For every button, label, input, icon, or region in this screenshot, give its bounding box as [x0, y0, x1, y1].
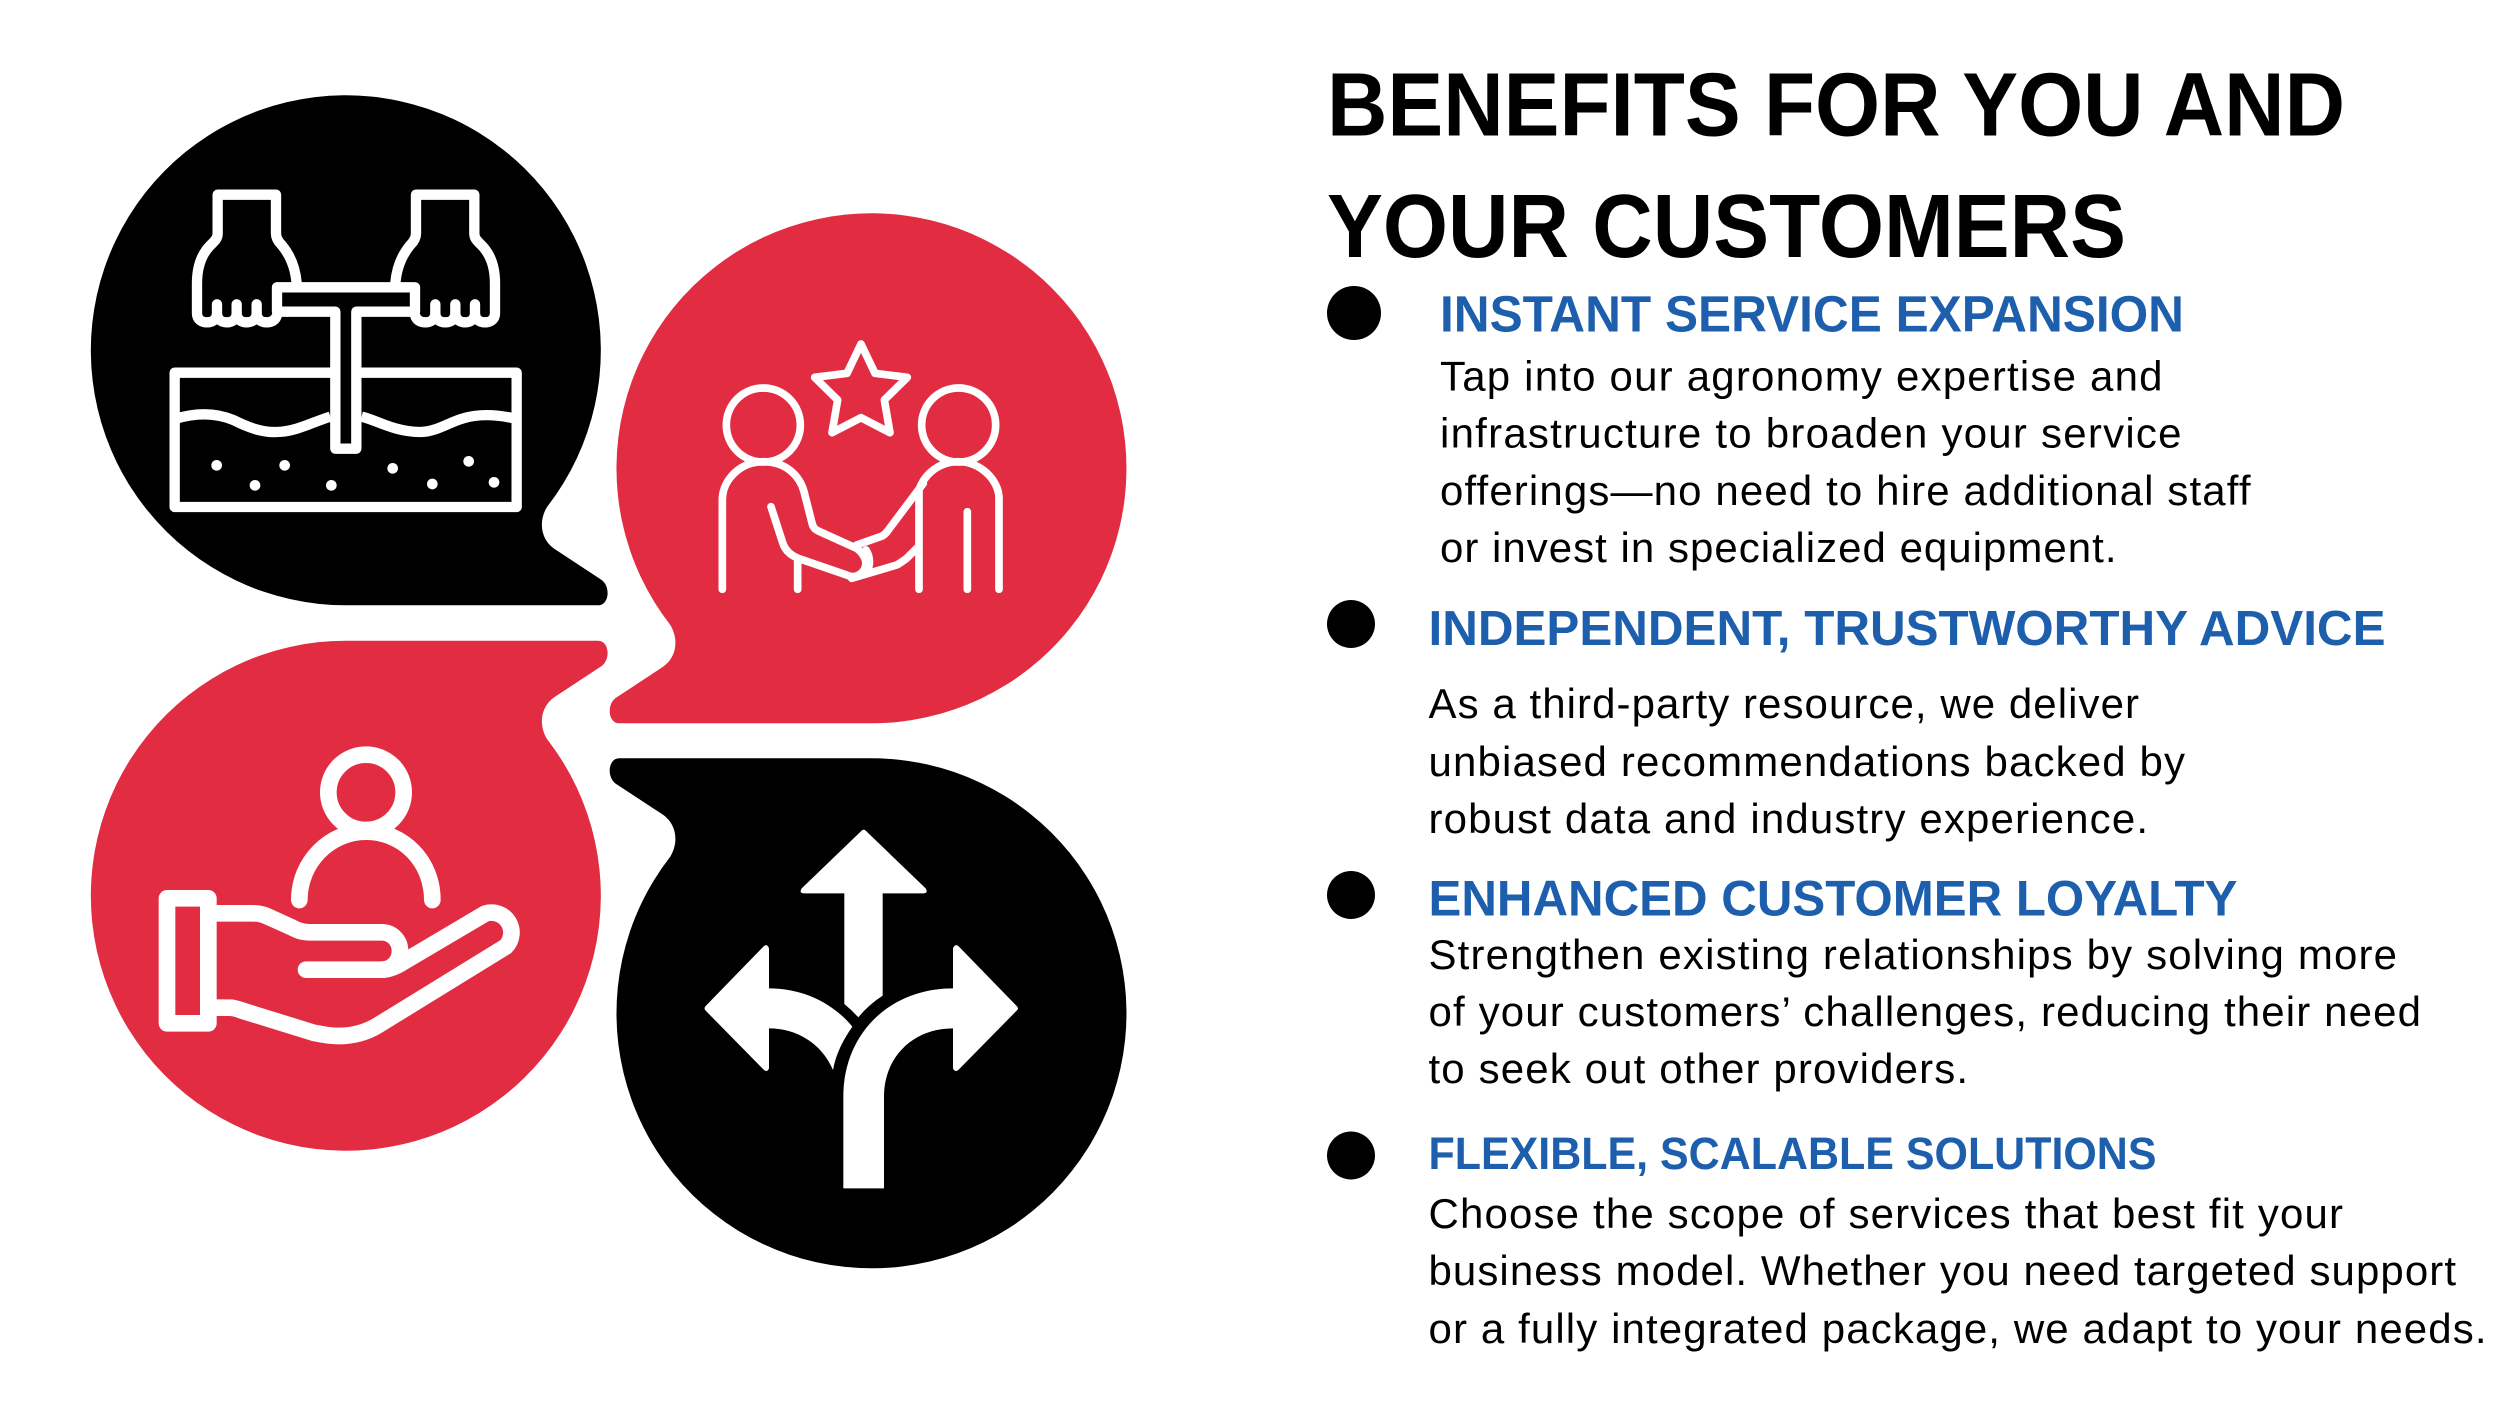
body text: infrastructure to broaden your service — [1440, 410, 2182, 456]
body text — [1428, 931, 2421, 1092]
panel: black bubble soil tool — [91, 95, 608, 605]
bubble shape black top left — [91, 95, 608, 605]
body text: offerings—no need to hire additional staff — [1440, 467, 2251, 514]
bubble shape red top right — [610, 213, 1126, 723]
bullet — [1327, 600, 1375, 648]
panel: red bubble handshake — [610, 213, 1126, 723]
bullet — [1327, 1132, 1375, 1180]
body text: Strengthen existing relationships by solving more — [1428, 931, 2397, 978]
benefit: instant service expansion — [1327, 286, 2251, 571]
bubble shape black bottom right — [610, 758, 1126, 1268]
bullet — [1327, 286, 1381, 340]
panel: red bubble person in hand — [91, 641, 608, 1151]
benefit: independent, trustworthy advice — [1327, 600, 2386, 842]
body text: unbiased recommendations backed by — [1428, 738, 2185, 785]
icon: handshake with star — [722, 344, 999, 589]
icon: three direction arrows — [704, 830, 1018, 1188]
title: YOUR CUSTOMERS — [1327, 177, 2126, 277]
body text — [1428, 680, 2185, 842]
body text: Choose the scope of services that best fit your — [1428, 1190, 2343, 1237]
body text: to seek out other providers. — [1428, 1045, 1968, 1092]
panel: black bubble branching arrows — [610, 758, 1126, 1268]
bubble shape red bottom left — [91, 641, 608, 1151]
title: BENEFITS FOR YOU AND — [1327, 56, 2345, 156]
body text: Tap into our agronomy expertise and — [1440, 352, 2162, 400]
icon: hand holding a person — [167, 755, 511, 1036]
title — [1327, 56, 2345, 277]
heading: INSTANT SERVICE EXPANSION — [1440, 286, 2184, 342]
body text: or a fully integrated package, we adapt to your needs. — [1428, 1305, 2486, 1352]
body text — [1440, 352, 2251, 571]
heading: INDEPENDENT, TRUSTWORTHY ADVICE — [1428, 602, 2386, 656]
body text: of your customers’ challenges, reducing their need — [1428, 988, 2421, 1035]
panel: speech bubbles with icons — [91, 95, 1126, 1268]
bullet — [1327, 871, 1375, 919]
heading: FLEXIBLE, SCALABLE SOLUTIONS — [1428, 1128, 2156, 1179]
body text: As a third-party resource, we deliver — [1428, 680, 2139, 727]
body text: robust data and industry experience. — [1428, 795, 2148, 842]
body text — [1428, 1190, 2486, 1352]
heading: ENHANCED CUSTOMER LOYALTY — [1428, 870, 2238, 926]
icon: hands pressing T-handle soil probe — [175, 195, 517, 507]
body text: or invest in specialized equipment. — [1440, 524, 2116, 571]
body text: business model. Whether you need targeted support — [1428, 1247, 2456, 1294]
benefit: flexible, scalable solutions — [1327, 1128, 2486, 1352]
benefit: enhanced customer loyalty — [1327, 870, 2421, 1092]
